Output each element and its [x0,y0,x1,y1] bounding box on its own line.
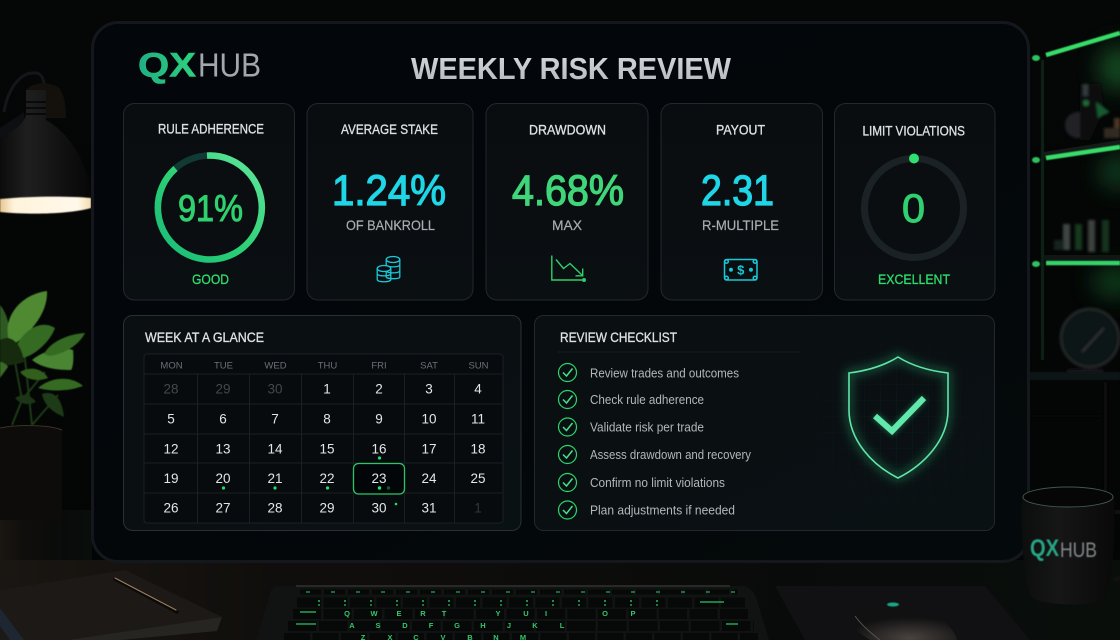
icon: shield with check [849,357,948,478]
calendar dates: 4 [474,382,482,396]
mug logo: HUB [1060,539,1097,562]
panel: review checklist [534,316,994,530]
status: good: GOOD [192,271,229,287]
gauge ring [864,154,964,258]
checklist items: Validate risk per trade [590,420,704,434]
activity dots [222,456,397,505]
keyboard letters: U [523,609,529,618]
keyboard [256,586,769,640]
status: excellent: EXCELLENT [878,271,950,287]
weekday headers: THU [318,360,337,372]
mouse [852,602,957,640]
notebook and pen [0,570,222,640]
calendar dates: 20 [215,471,231,486]
calendar dates: 17 [421,442,437,456]
progress ring [158,156,262,260]
wall clock [1030,309,1119,492]
heading: average stake: AVERAGE STAKE [341,122,438,137]
calendar dates: 24 [421,471,437,486]
logo [138,46,261,84]
title: WEEKLY RISK REVIEW [411,51,732,86]
mug logo: QX [1030,535,1059,562]
calendar dates: 28 [267,500,283,516]
calendar dates: 1 [323,382,331,396]
calendar dates: 15 [319,442,335,456]
keyboard letters: I [545,609,547,618]
calendar dates: 29 [319,500,335,516]
weekday headers: WED [264,360,287,372]
weekday headers: TUE [214,360,233,372]
keyboard letters: F [429,621,434,630]
logo: HUB [198,46,261,84]
calendar dates: 27 [215,500,231,516]
caption: of bankroll: OF BANKROLL [346,217,435,233]
calendar dates: 28 [163,382,179,396]
checklist items: Plan adjustments if needed [590,504,735,518]
panel: limit violations [834,104,995,300]
calendar dates: 12 [163,442,179,456]
calendar dates: 29 [215,382,231,396]
keyboard letters: H [480,621,486,630]
calendar dates: 2 [375,382,383,396]
heading: review checklist: REVIEW CHECKLIST [560,330,677,345]
mug logo [1030,535,1097,562]
monitor [92,22,1028,562]
keyboard letters: Q [344,609,350,618]
calendar dates: 10 [421,412,437,426]
calendar dates: 7 [271,412,279,426]
keyboard letters: J [507,621,511,630]
calendar dates: 31 [421,500,437,516]
keyboard letters [344,609,636,640]
heading: rule adherence: RULE ADHERENCE [158,122,264,137]
panel: week at a glance [124,316,521,530]
calendar dates: 8 [323,412,331,426]
heading: week at a glance: WEEK AT A GLANCE [145,330,264,345]
keyboard letters: L [560,621,565,630]
weekday headers: SAT [420,360,438,372]
keyboard letters: P [630,609,636,618]
icon: banknote [724,260,757,280]
checklist items: Confirm no limit violations [590,476,725,490]
checklist items [558,364,752,519]
calendar dates: 30 [371,500,387,516]
keyboard letters: R [420,609,426,618]
calendar dates: 1 [474,500,482,516]
keyboard letters: G [454,621,460,630]
calendar dates: 21 [267,471,283,486]
weekday headers: SUN [468,360,489,372]
calendar dates: 25 [470,471,486,486]
icon: coins [377,256,400,282]
calendar dates: 16 [371,442,387,456]
green lit shelves [1030,33,1120,380]
keyboard letters: S [375,621,381,630]
value: 91%: 91% [178,188,243,229]
calendar dates: 23 [371,471,387,486]
highlighted day [354,464,404,494]
panel: average stake [307,104,473,300]
keyboard letters: O [602,609,608,618]
calendar dates: 11 [471,412,485,426]
calendar dates: 19 [163,471,179,486]
value: 1.24%: 1.24% [332,167,446,215]
checklist items: Check rule adherence [590,393,704,407]
keyboard letters: Y [495,609,501,618]
panel: drawdown [486,104,648,300]
calendar dates: 6 [219,412,227,426]
calendar dates: 30 [267,382,283,396]
panel: payout [661,104,822,300]
keyboard letters: K [532,621,538,630]
desk lamp [0,73,91,214]
weekday headers: MON [160,360,183,372]
value: 2.31: 2.31 [701,167,774,215]
logo: QX [138,46,196,84]
keyboard letters: T [442,609,447,618]
calendar dates: 9 [375,412,383,426]
panel: rule adherence [124,104,294,300]
heading: payout: PAYOUT [716,122,765,138]
calendar dates: 14 [267,442,283,456]
icon: falling chart [552,256,585,281]
potted plant [0,291,85,520]
calendar dates: 5 [167,412,175,426]
keyboard letters: A [349,621,355,630]
calendar dates: 3 [425,382,433,396]
weekday headers: FRI [371,360,387,372]
value: 4.68%: 4.68% [512,167,624,215]
calendar dates: 26 [163,500,179,516]
caption: max: MAX [552,217,583,233]
calendar dates: 22 [319,471,335,486]
value: 0: 0 [902,187,925,231]
checklist items: Assess drawdown and recovery [590,448,752,462]
keyboard letters: D [402,621,408,630]
calendar dates [163,382,486,516]
heading: drawdown: DRAWDOWN [529,122,606,138]
mouse pad [775,586,1030,640]
keyboard letters: W [370,609,378,618]
weekday headers [160,360,489,372]
calendar grid [144,354,503,523]
keyboard letters: E [396,609,402,618]
icon: banknote: $ [737,262,745,278]
caption: r-multiple: R-MULTIPLE [702,217,779,233]
calendar dates: 13 [215,442,231,456]
coffee mug [1021,487,1120,605]
checklist items: Review trades and outcomes [590,366,739,380]
heading: limit violations: LIMIT VIOLATIONS [862,124,965,138]
calendar dates: 18 [470,442,486,456]
